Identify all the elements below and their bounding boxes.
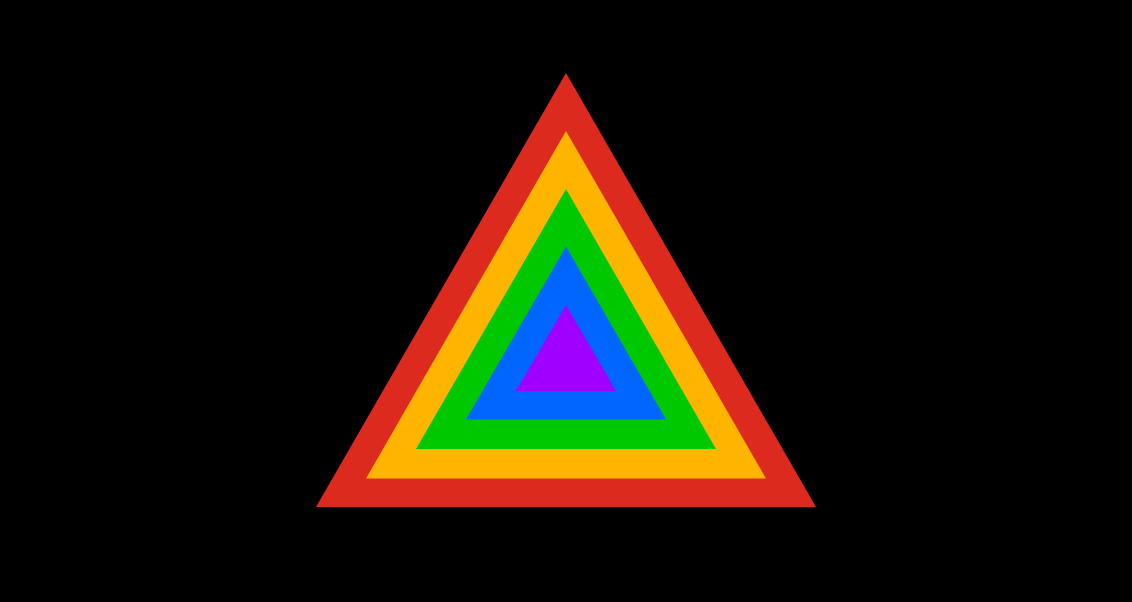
blue triangle bbox=[466, 246, 666, 420]
purple triangle bbox=[516, 305, 616, 391]
amber triangle bbox=[366, 131, 766, 478]
red triangle bbox=[316, 73, 816, 507]
green triangle bbox=[416, 189, 716, 449]
